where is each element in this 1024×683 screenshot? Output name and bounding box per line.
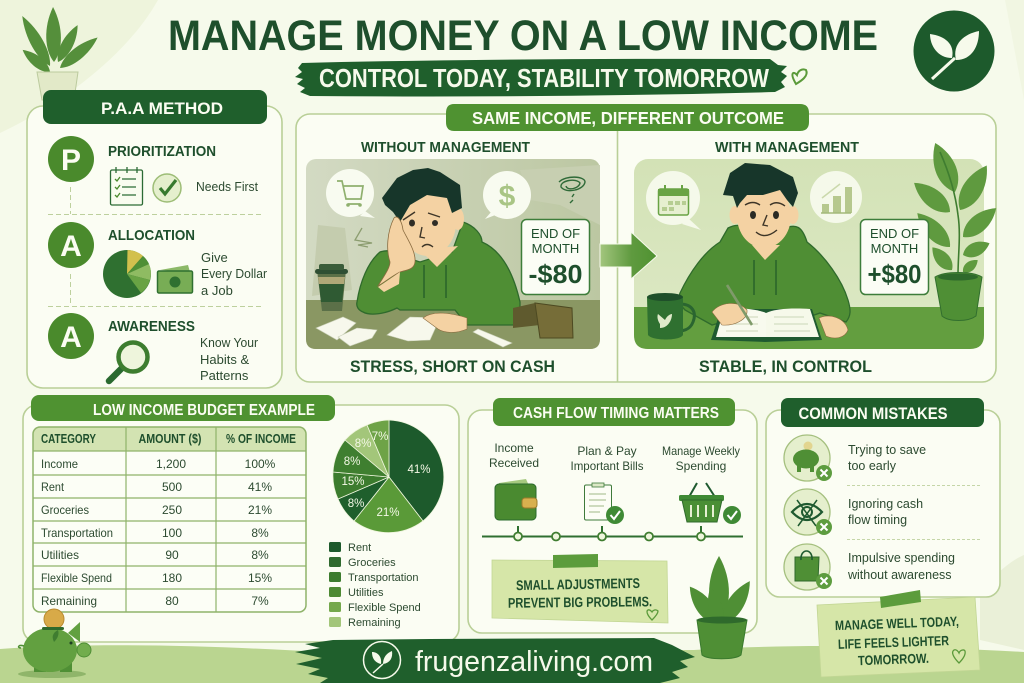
heading: common mistakes — [781, 398, 984, 427]
callout: end of month plus: MONTH — [871, 241, 918, 256]
note: manage well today: TOMORROW. — [858, 651, 929, 668]
step labels — [489, 441, 740, 473]
item: allocation — [48, 222, 268, 298]
callout: end of month minus: -$80 — [528, 259, 582, 289]
item: prioritization: Needs First — [196, 179, 258, 194]
mistake: saving too early: Trying to save — [848, 443, 926, 457]
pie legend: Transportation — [348, 572, 419, 584]
wallet — [513, 303, 573, 338]
subtitle banner — [295, 59, 787, 96]
callout: end of month minus — [522, 220, 590, 294]
budget table: 250 — [162, 503, 182, 517]
person: head — [400, 190, 464, 256]
person: head — [730, 184, 798, 248]
item: prioritization — [48, 136, 258, 205]
person: neck — [752, 245, 780, 260]
scene: stressed person — [306, 159, 600, 349]
plant: top left — [17, 7, 101, 100]
icon: footer logo — [364, 642, 400, 678]
item: awareness: AWARENESS — [108, 318, 195, 335]
mug — [647, 293, 694, 340]
callout: end of month plus: END OF — [870, 226, 919, 241]
mistake: ignoring cash flow — [784, 489, 923, 535]
item: prioritization: PRIORITIZATION — [108, 143, 216, 160]
budget table: Flexible Spend — [41, 571, 112, 585]
pie legend: Flexible Spend — [348, 602, 421, 614]
icon: chart bubble — [810, 171, 862, 223]
plant: bottom centre — [683, 556, 757, 659]
budget table: 8% — [251, 548, 269, 562]
caption: stress: STRESS, SHORT ON CASH — [350, 357, 555, 376]
step labels: Income — [494, 441, 534, 455]
item: awareness: Patterns — [200, 368, 249, 383]
mistake: impulsive spending — [784, 544, 955, 590]
subtitle banner: CONTROL TODAY, STABILITY TOMORROW — [319, 65, 770, 93]
callout: end of month plus — [860, 220, 928, 294]
person: face — [403, 212, 440, 247]
pie chart: 15% — [341, 476, 365, 488]
step labels: Received — [489, 456, 539, 470]
icon: basket — [679, 483, 741, 524]
person: hoodie — [357, 222, 520, 325]
mistake: ignoring cash flow: flow timing — [848, 513, 907, 527]
person: hand on paper — [423, 313, 467, 332]
heading: P.A.A method: P.A.A METHOD — [101, 99, 223, 118]
pie chart: 8% — [344, 456, 360, 468]
pie legend: Utilities — [348, 587, 384, 599]
panel: budget example — [23, 395, 459, 642]
budget table: Remaining — [41, 594, 97, 608]
person: hand on cheek — [378, 217, 415, 292]
mistake: impulsive spending: without awareness — [847, 568, 952, 582]
item: awareness — [48, 313, 259, 383]
papers — [316, 317, 512, 347]
website: frugenzaliving.com — [415, 646, 653, 678]
heading: budget: LOW INCOME BUDGET EXAMPLE — [93, 402, 315, 419]
mistake: impulsive spending: Impulsive spending — [848, 551, 955, 565]
budget table: AMOUNT ($) — [138, 432, 202, 446]
heading: cash flow — [493, 398, 735, 426]
item: awareness: A — [60, 321, 82, 354]
item: awareness: Habits & — [200, 352, 249, 367]
pie chart: 41% — [407, 464, 431, 476]
mistake: saving too early: too early — [848, 459, 897, 473]
budget table: 7% — [251, 594, 269, 608]
pie legend: Rent — [348, 542, 371, 554]
scene: calm person — [634, 139, 1002, 349]
heading: P.A.A method — [43, 90, 267, 124]
footer banner — [295, 638, 695, 683]
item: allocation: ALLOCATION — [108, 227, 195, 244]
budget table — [33, 427, 306, 612]
panel: same income, different outcome — [296, 104, 1002, 382]
icon: heart — [792, 69, 807, 84]
budget table: 100 — [162, 526, 182, 540]
item: awareness: Know Your — [200, 335, 259, 350]
note: manage well today: MANAGE WELL TODAY, — [835, 614, 959, 633]
step labels: Spending — [676, 459, 726, 473]
coffee cup — [315, 264, 348, 311]
pie chart — [333, 420, 444, 533]
budget table: 15% — [248, 571, 272, 585]
item: allocation: a Job — [201, 283, 233, 298]
heading: budget — [31, 395, 335, 421]
person: neck — [420, 246, 458, 267]
item: allocation: Give — [201, 250, 228, 265]
pie chart: 8% — [348, 498, 364, 510]
budget table: Groceries — [41, 503, 89, 517]
step labels: Important Bills — [570, 459, 644, 473]
timeline — [482, 526, 743, 540]
person: face — [745, 202, 785, 236]
arrow — [600, 232, 657, 279]
budget table: Transportation — [41, 526, 113, 540]
icon: swirl — [559, 177, 585, 203]
book — [711, 308, 822, 342]
panel: P.A.A method — [27, 90, 282, 388]
budget table: 500 — [162, 480, 182, 494]
budget table: 41% — [248, 480, 272, 494]
note: manage well today — [817, 590, 980, 677]
mistake: saving too early — [784, 435, 926, 481]
budget table: Income — [41, 457, 78, 471]
person: other hand — [819, 316, 848, 338]
heading: without management: WITHOUT MANAGEMENT — [361, 139, 530, 156]
callout: end of month minus: MONTH — [532, 241, 579, 256]
mistake: ignoring cash flow: Ignoring cash — [848, 497, 923, 511]
item: allocation: Every Dollar — [201, 266, 268, 281]
budget table: 100% — [245, 457, 276, 471]
budget table: 180 — [162, 571, 182, 585]
pie legend: Remaining — [348, 617, 401, 629]
icon: logo leaf — [914, 10, 994, 92]
pie legend: Groceries — [348, 557, 396, 569]
pie legend — [329, 542, 421, 629]
person: hair — [723, 163, 798, 208]
icon: clipboard — [584, 483, 624, 524]
pie chart: 7% — [372, 431, 388, 443]
budget table: Utilities — [41, 548, 79, 562]
heading: with management: WITH MANAGEMENT — [715, 139, 859, 156]
heading: same income: SAME INCOME, DIFFERENT OUTCOME — [472, 108, 784, 128]
heading: same income — [446, 104, 809, 131]
icon: wallet — [495, 479, 537, 520]
icon: cart bubble — [326, 169, 375, 218]
icon: calendar bubble — [646, 171, 701, 230]
callout: end of month minus: END OF — [531, 226, 580, 241]
budget table: 21% — [248, 503, 272, 517]
plant: large — [908, 139, 1002, 320]
budget table: 90 — [165, 548, 179, 562]
budget table: Rent — [41, 480, 65, 494]
person: hoodie — [679, 225, 850, 325]
callout: end of month plus: +$80 — [868, 259, 922, 289]
budget table: CATEGORY — [41, 432, 97, 446]
pie chart: 21% — [376, 507, 400, 519]
caption: stable: STABLE, IN CONTROL — [699, 357, 872, 376]
panel: common mistakes — [766, 398, 1000, 597]
step labels: Plan & Pay — [577, 444, 637, 458]
note: small adjustments: PREVENT BIG PROBLEMS. — [508, 593, 652, 611]
step labels: Manage Weekly — [662, 444, 740, 458]
heading: common mistakes: COMMON MISTAKES — [798, 404, 948, 423]
budget table: 8% — [251, 526, 269, 540]
person: writing hand and pen — [712, 285, 752, 325]
budget table: 80 — [165, 594, 179, 608]
icon: dollar bubble — [483, 171, 531, 219]
person: hair — [382, 168, 462, 222]
budget table: 1,200 — [156, 457, 186, 471]
pie chart: 8% — [355, 438, 371, 450]
note: manage well today: LIFE FEELS LIGHTER — [838, 633, 949, 652]
note: small adjustments — [492, 554, 668, 623]
panel: cash flow timing — [468, 398, 757, 633]
heading: cash flow: CASH FLOW TIMING MATTERS — [513, 405, 719, 422]
budget table: % OF INCOME — [226, 432, 296, 446]
title: MANAGE MONEY ON A LOW INCOME — [168, 12, 878, 60]
item: allocation: A — [60, 230, 82, 263]
item: prioritization: P — [61, 144, 81, 177]
note: small adjustments: SMALL ADJUSTMENTS — [516, 575, 640, 593]
icon: piggy bank — [18, 609, 91, 678]
icon: dollar bubble: $ — [499, 180, 516, 213]
